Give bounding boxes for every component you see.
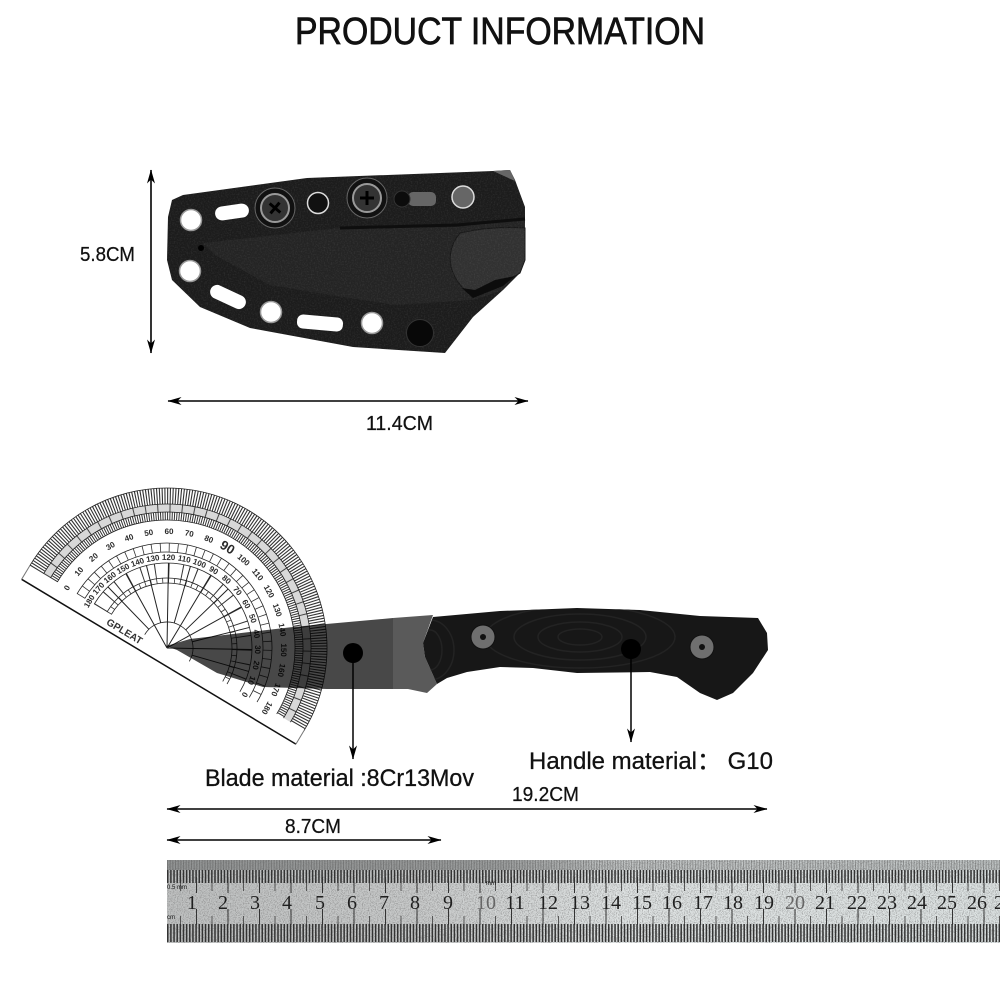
inner scale numbers: 140 (130, 556, 146, 569)
ruler small labels: mm (486, 881, 496, 887)
ruler numbers: 13 (570, 892, 590, 914)
screw 1 (255, 188, 295, 228)
ruler numbers: 7 (379, 892, 389, 914)
half cm ticks bottom (180, 916, 1000, 924)
ruler numbers: 5 (315, 892, 325, 914)
outer scale numbers: 50 (144, 528, 154, 538)
top speckled band (167, 860, 1000, 870)
inner scale numbers: 20 (250, 660, 261, 671)
width label: 11.4CM (366, 412, 433, 435)
outer scale numbers: 160 (276, 663, 287, 678)
ruler numbers: 19 (754, 892, 774, 914)
outer scale numbers: 100 (235, 552, 252, 568)
ruler numbers: 22 (847, 892, 867, 914)
inner scale numbers: 10 (245, 675, 257, 687)
ruler numbers: 16 (662, 892, 682, 914)
panel: sheath (165, 168, 527, 356)
radial lines (97, 533, 281, 690)
ruler numbers: 24 (907, 892, 927, 914)
ruler numbers: 3 (250, 892, 260, 914)
sheath pocket (502, 289, 504, 290)
ruler speckle (167, 860, 1000, 943)
retention bump (450, 228, 525, 297)
outer scale numbers: 30 (104, 540, 117, 552)
inner scale numbers: 150 (115, 561, 132, 576)
sheath ridge shadow (340, 219, 525, 228)
blade (166, 618, 400, 689)
ruler numbers: 10 (476, 892, 496, 914)
small screw (394, 191, 410, 207)
ruler numbers: 17 (693, 892, 713, 914)
ruler numbers: 25 (937, 892, 957, 914)
eyelet grey (452, 186, 474, 208)
ruler numbers: 21 (815, 892, 835, 914)
eyelet holes (180, 210, 382, 334)
sheath body (167, 170, 525, 353)
blade length label: 8.7CM (285, 815, 341, 838)
inner scale numbers: 40 (251, 629, 262, 639)
inner scale numbers: 180 (82, 593, 97, 609)
outer scale numbers: 110 (250, 567, 265, 583)
height label: 5.8CM (80, 243, 135, 266)
outer scale numbers: 0 (62, 583, 72, 592)
inner scale numbers: 70 (231, 585, 244, 598)
height arrow (150, 170, 152, 353)
handle material label: Handle material： G10 (529, 748, 773, 775)
ring dividers (81, 510, 305, 700)
length label: 19.2CM (512, 783, 579, 806)
handle grain (428, 609, 676, 680)
knife tip corner (493, 170, 515, 181)
blade material label: Blade material :8Cr13Mov (205, 765, 474, 792)
ring lines (30, 428, 387, 730)
logo: GPLEAT (104, 617, 144, 647)
ruler numbers: 23 (877, 892, 897, 914)
ruler numbers: 1 (187, 892, 197, 914)
outer scale numbers: 140 (277, 622, 288, 638)
blade marker and arrow (343, 643, 363, 759)
outer tick band (37, 439, 376, 726)
outer scale numbers: 10 (73, 565, 86, 578)
inner scale numbers: 30 (253, 645, 262, 655)
outer scale numbers: 90 (217, 537, 238, 557)
blade length arrow (167, 839, 441, 841)
base end edges (22, 566, 304, 744)
ruler numbers: 20 (785, 892, 805, 914)
knife (166, 606, 768, 700)
handle screw 1 (471, 625, 495, 649)
inner scale numbers: 130 (146, 553, 161, 564)
ruler numbers: 12 (538, 892, 558, 914)
grey slot (408, 192, 436, 206)
inner scale numbers: 170 (91, 580, 107, 597)
handle marker and arrow (621, 639, 641, 742)
title: PRODUCT INFORMATION (295, 11, 705, 53)
half cm ticks top (180, 883, 1000, 891)
ruler numbers: 15 (632, 892, 652, 914)
handle (423, 608, 768, 700)
ricasso (393, 615, 437, 693)
ruler numbers: 9 (443, 892, 453, 914)
sheath texture (165, 168, 527, 356)
total length arrow (167, 808, 767, 810)
box dividers (47, 456, 359, 720)
handle screw 2 (690, 635, 714, 659)
ruler small labels: cm (167, 915, 175, 921)
slots (208, 203, 344, 332)
ruler numbers: 6 (347, 892, 357, 914)
inner tick band (54, 467, 348, 716)
bump shadow (462, 276, 515, 298)
cm ticks top (196, 877, 1000, 893)
screw 2 (347, 178, 387, 218)
outer scale numbers: 20 (87, 551, 100, 564)
ruler small labels: 0.5 mm (167, 885, 187, 891)
inner scale numbers: 100 (192, 557, 208, 570)
inner scale numbers: 160 (102, 570, 118, 585)
outer scale numbers: 80 (203, 533, 215, 545)
ruler (167, 860, 1000, 943)
ruler small labels (167, 881, 496, 921)
inner scale numbers: 50 (247, 613, 258, 625)
width arrow (168, 400, 528, 402)
eyelet dark (308, 192, 328, 214)
box band (47, 456, 359, 720)
ruler numbers: 14 (601, 892, 621, 914)
inner scale numbers: 120 (162, 553, 176, 562)
inner scale numbers: 80 (220, 573, 233, 586)
upper half-mm ticks (167, 860, 1000, 870)
inner scale numbers (82, 518, 297, 703)
rivet (406, 320, 434, 346)
ruler body (167, 860, 1000, 943)
outer scale numbers: 40 (123, 532, 135, 544)
outer scale numbers: 180 (259, 700, 274, 717)
bottom mm ticks (167, 924, 1000, 942)
outer scale numbers: 130 (271, 602, 284, 618)
inner scale numbers: 90 (207, 564, 220, 577)
ruler numbers: 26 (967, 892, 987, 914)
protractor base (22, 566, 304, 744)
base edge (22, 579, 296, 744)
ruler numbers: 11 (505, 892, 525, 914)
cm ticks bottom (196, 909, 1000, 925)
ruler numbers: 2 (218, 892, 228, 914)
inner scale numbers: 110 (177, 554, 192, 565)
ruler numbers: 4 (282, 892, 292, 914)
ruler numbers: 8 (410, 892, 420, 914)
protractor (22, 428, 387, 744)
inner scale numbers: 60 (240, 598, 253, 611)
outer scale numbers: 60 (165, 527, 174, 536)
top mm ticks (167, 870, 1000, 883)
outer scale numbers: 120 (262, 583, 276, 600)
outer scale numbers: 170 (269, 682, 282, 698)
ruler numbers (187, 892, 1000, 914)
ruler numbers: 18 (723, 892, 743, 914)
inner scale numbers: 0 (239, 690, 250, 699)
outer scale numbers (60, 479, 335, 717)
outer scale numbers: 150 (279, 643, 288, 657)
outer scale numbers: 70 (184, 528, 195, 539)
small dot (198, 245, 204, 251)
